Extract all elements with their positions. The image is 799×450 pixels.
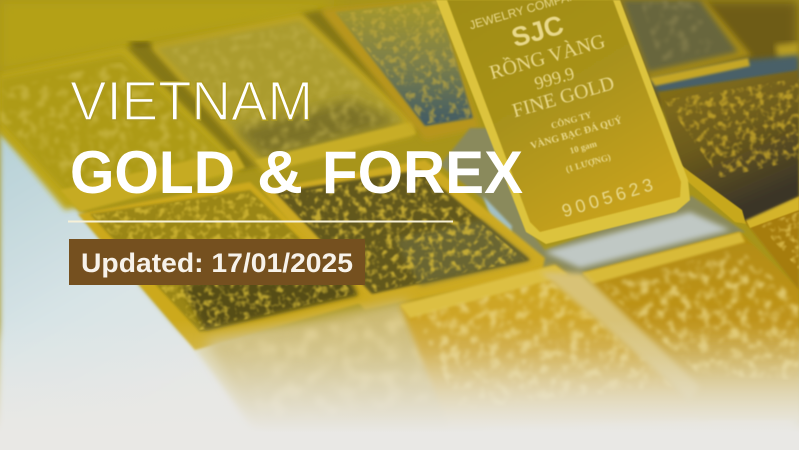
engraved bar text: (1 LƯỢNG) bbox=[564, 152, 612, 174]
date badge: Updated: 17/01/2025 bbox=[81, 248, 353, 278]
top right background bbox=[610, 0, 799, 110]
gold bar: lower right bbox=[540, 232, 799, 420]
engraved bar text: 9005623 bbox=[559, 173, 659, 221]
engraved bar text: CÔNG TY bbox=[550, 109, 593, 131]
gap shadow bbox=[128, 42, 152, 54]
engraved bar text: FINE GOLD bbox=[510, 72, 617, 122]
blurred top area bbox=[0, 0, 340, 72]
gold bar: top right grey bbox=[620, 0, 799, 82]
title: GOLD & FOREX: FOREX bbox=[322, 139, 523, 206]
gold bar: top left bbox=[0, 47, 245, 212]
pale base under the lower bars bbox=[0, 335, 799, 450]
pale blue surface bbox=[0, 132, 270, 450]
foreground SJC gold bar bbox=[436, 0, 690, 244]
title: VIETNAM: VIETNAM bbox=[70, 69, 313, 132]
gold bar: right edge bbox=[742, 195, 799, 290]
engraved bar text: RỒNG VÀNG bbox=[487, 28, 608, 84]
engraved bar text: 10 gam bbox=[568, 138, 598, 156]
date badge bbox=[69, 239, 365, 285]
title: GOLD & FOREX: & bbox=[257, 139, 303, 206]
gold bar: right dark bbox=[650, 55, 799, 224]
engraved bar text: SJC bbox=[508, 10, 567, 53]
bottom fade bbox=[0, 320, 799, 450]
gold bar: centre dark bbox=[262, 160, 545, 310]
shaded surface behind the SJC bar bbox=[440, 128, 745, 280]
engraved bar text: 999.9 bbox=[532, 63, 577, 93]
gold bar: blue-toned centre bbox=[320, 0, 480, 140]
engraved bar text: VÀNG BẠC ĐÁ QUÝ bbox=[529, 114, 624, 152]
engraved bar text bbox=[468, 0, 659, 221]
gold bar: lower left bbox=[78, 182, 372, 350]
title: GOLD & FOREX bbox=[70, 139, 523, 206]
gold bar: bottom middle bbox=[400, 265, 710, 430]
title: GOLD & FOREX: GOLD bbox=[70, 139, 235, 206]
gold bar: bottom centre bbox=[205, 300, 480, 450]
gold bar: top centre bbox=[150, 14, 417, 172]
divider line bbox=[68, 220, 453, 222]
